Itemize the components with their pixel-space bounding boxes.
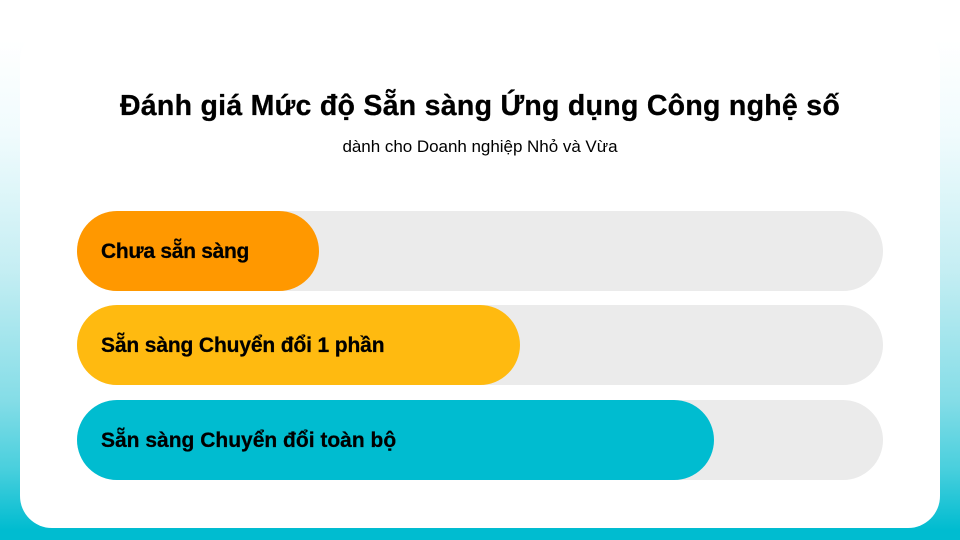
bar fill: Chưa sẵn sàng [77,211,319,291]
bar: Sẵn sàng Chuyển đổi toàn bộ [77,400,883,480]
bar fill: Sẵn sàng Chuyển đổi toàn bộ [77,400,714,480]
title: Đánh giá Mức độ Sẵn sàng Ứng dụng Công nghệ số [120,90,840,122]
bar fill: Sẵn sàng Chuyển đổi 1 phần [77,305,520,385]
bar: Sẵn sàng Chuyển đổi 1 phần [77,305,883,385]
bar label: Sẵn sàng Chuyển đổi toàn bộ: Sẵn sàng Chuyển đổi toàn bộ [101,429,396,452]
bar: Chưa sẵn sàng [77,211,883,291]
bar label: Sẵn sàng Chuyển đổi 1 phần: Sẵn sàng Chuyển đổi 1 phần [101,334,384,357]
subtitle: dành cho Doanh nghiệp Nhỏ và Vừa [342,137,618,156]
bar label: Chưa sẵn sàng: Chưa sẵn sàng [101,240,249,263]
